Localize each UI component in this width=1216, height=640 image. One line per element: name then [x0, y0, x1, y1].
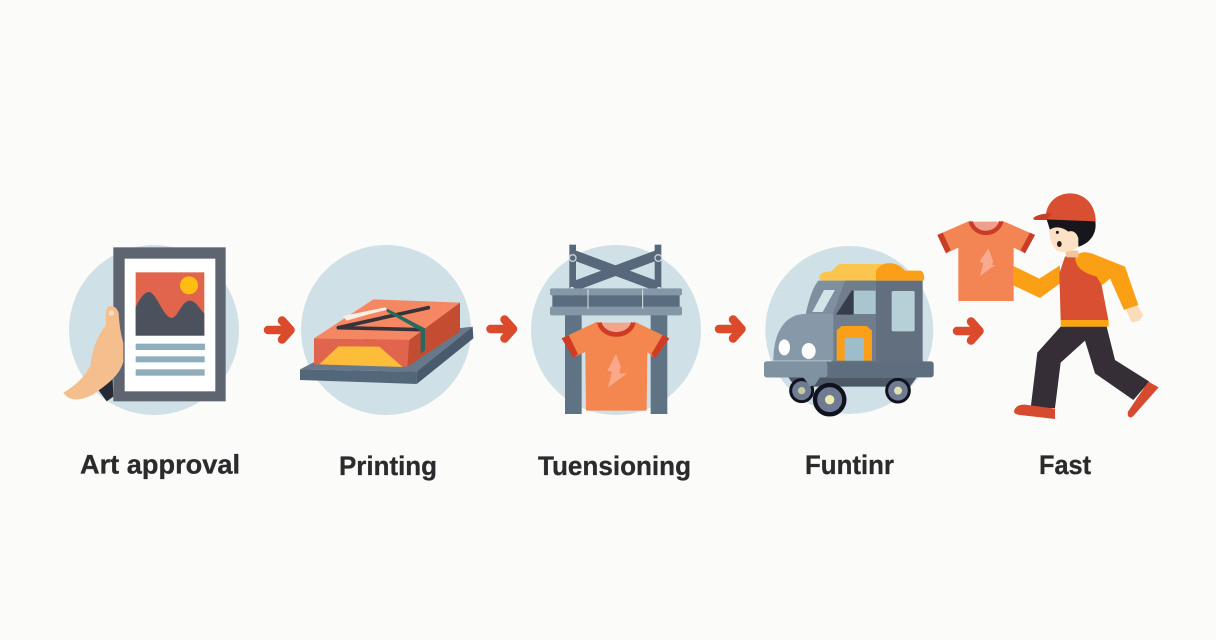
neck — [1065, 251, 1078, 257]
icon: tensioning frame with shirt — [531, 245, 701, 415]
arm holding shirt — [1013, 265, 1060, 298]
face — [1049, 227, 1078, 252]
pants — [1031, 327, 1149, 408]
arrow 4 — [957, 322, 980, 340]
panel: fast — [937, 193, 1159, 480]
icon: poster held in hand — [63, 245, 239, 415]
shoes — [1014, 405, 1055, 419]
label: funtinr: Funtinr — [805, 450, 894, 480]
back arm — [1075, 252, 1138, 310]
icon: runner delivering shirt — [937, 193, 1159, 419]
torso — [1059, 255, 1108, 320]
icon: truck — [764, 246, 934, 414]
panel: funtinr — [764, 246, 934, 480]
label: tuensioning: Tuensioning — [538, 451, 691, 481]
panel: printing — [300, 245, 473, 481]
hair — [1047, 219, 1096, 247]
panel: tensioning — [531, 245, 701, 481]
arrow 2 — [490, 320, 513, 338]
panel: art approval — [63, 245, 240, 480]
label: fast: Fast — [1039, 450, 1091, 480]
icon: screen printing press — [300, 245, 473, 415]
arrow 3 — [719, 320, 742, 338]
label: printing: Printing — [339, 451, 437, 481]
shirt — [937, 221, 1035, 301]
arrow 1 — [268, 320, 290, 340]
label: art approval: Art approval — [80, 450, 240, 480]
cap — [1046, 193, 1096, 221]
